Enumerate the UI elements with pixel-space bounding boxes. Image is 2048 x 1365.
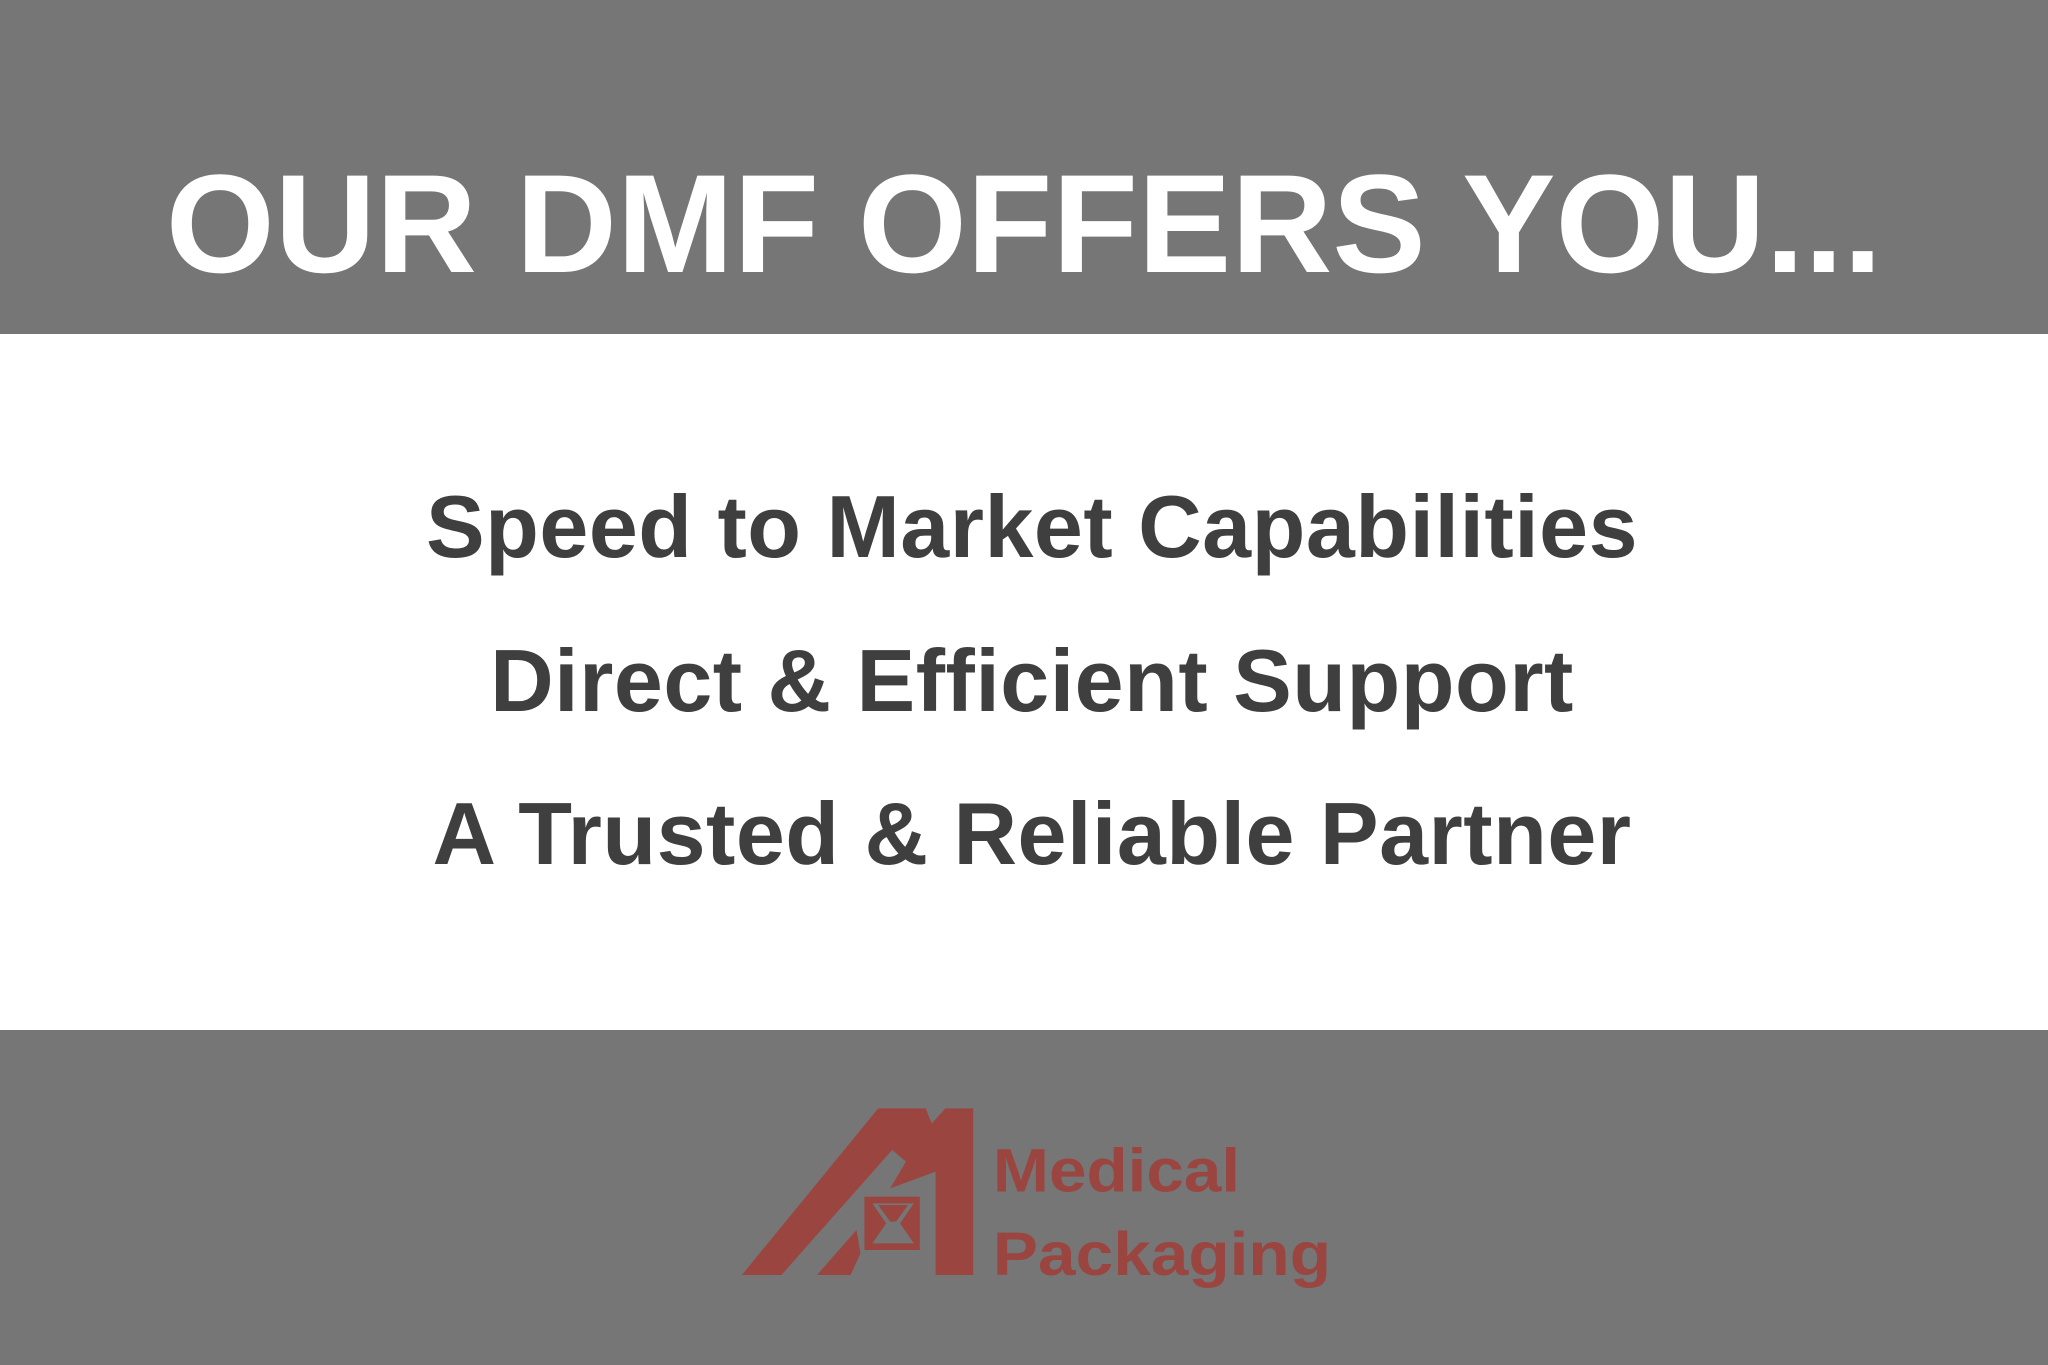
benefit 3: A Trusted & Reliable Partner (432, 784, 1632, 883)
header band (0, 0, 2048, 334)
logo mark (742, 1108, 973, 1275)
footer band (0, 1030, 2048, 1365)
logo text: Medical (993, 1137, 1240, 1205)
logo (742, 1108, 1331, 1289)
logo text (993, 1137, 1331, 1289)
title: OUR DMF OFFERS YOU... (166, 145, 1882, 302)
benefit 2: Direct & Efficient Support (490, 631, 1574, 730)
benefit list (426, 477, 1638, 883)
logo text: Packaging (993, 1220, 1331, 1289)
benefit 1: Speed to Market Capabilities (426, 477, 1638, 576)
